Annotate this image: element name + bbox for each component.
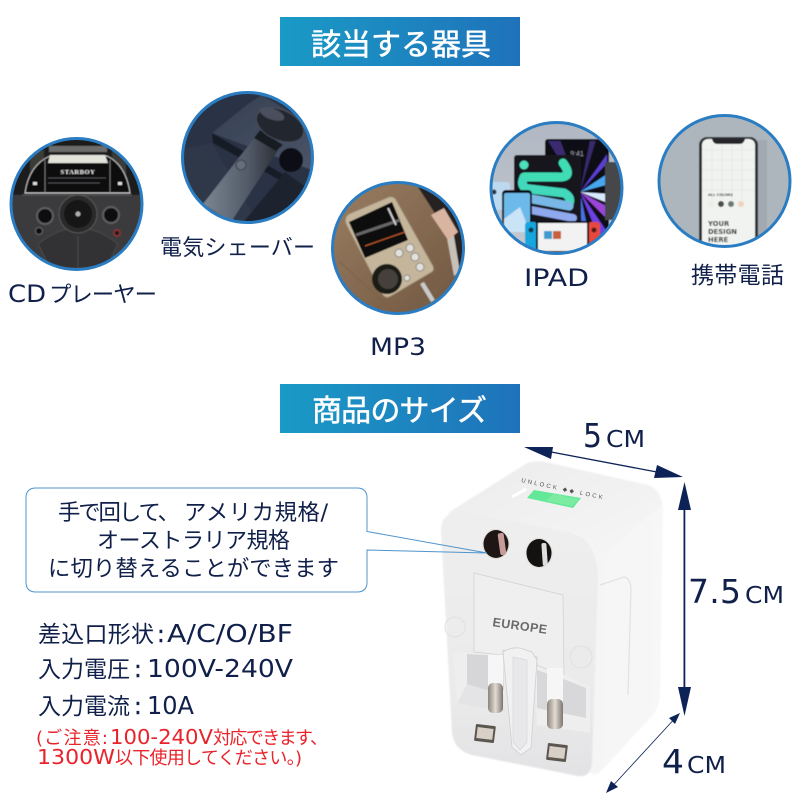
- dimension label: 4cm: CM: [687, 751, 726, 779]
- right recess: [535, 667, 590, 733]
- label: CD player: プレーヤー: [49, 282, 157, 308]
- specification list: :: [157, 622, 165, 648]
- specification list: 10A: [147, 691, 194, 720]
- specification list: 入力電圧: [38, 657, 130, 683]
- device: mobile phone: [657, 114, 792, 289]
- specification list: 入力電流: [38, 694, 130, 720]
- dimension label: 5cm: CM: [606, 425, 645, 453]
- label: CD player: CD: [8, 280, 46, 308]
- icon: phone photo: ALL COLORS: [708, 193, 733, 197]
- callout: switching plug standards: [26, 488, 487, 592]
- contact right: [546, 743, 568, 762]
- specification list: A/C/O/BF: [167, 619, 293, 648]
- icon: CD player photo: STARBOY: [61, 169, 95, 176]
- device: CD player: [8, 136, 157, 308]
- heading: applicable devices: 該当する器具: [311, 28, 491, 63]
- heading: applicable devices: [280, 17, 520, 66]
- icon: phone photo: [660, 117, 788, 245]
- red caution note: (ご注意:: [36, 728, 108, 749]
- heading: product size: 商品のサイズ: [312, 394, 487, 429]
- icon: phone photo: HERE: [708, 236, 729, 244]
- dimension label: 7.5cm: 7.5: [688, 572, 741, 611]
- specification list: 100V-240V: [147, 654, 293, 683]
- icon: shaver photo: [184, 94, 311, 221]
- dimension arrow: width: [524, 447, 683, 478]
- red caution note: 対応できます、: [213, 728, 328, 749]
- europe panel: [474, 573, 564, 676]
- dimension label: 7.5cm: [688, 572, 784, 611]
- red caution note: 1300W: [37, 745, 115, 769]
- red caution note: 100-240V: [110, 725, 213, 749]
- dimension arrow: depth: [606, 713, 680, 793]
- specification list: :: [134, 657, 142, 683]
- dimension label: 4cm: [662, 742, 726, 781]
- heading: product size: [280, 384, 520, 433]
- left pin: [488, 655, 503, 713]
- side panel outline: [600, 577, 631, 695]
- device: iPad: [488, 120, 624, 292]
- dimension label: 5cm: 5: [583, 416, 602, 455]
- socket holes: [482, 529, 552, 568]
- callout: switching plug standards: に切り替えることができます: [48, 556, 339, 582]
- retaining circles: [445, 617, 592, 668]
- contact left: [474, 724, 496, 743]
- device: MP3 player: [330, 180, 470, 361]
- left recess: [453, 652, 505, 712]
- label: CD player: [8, 280, 157, 308]
- icon: CD player photo: [12, 140, 140, 268]
- red caution note: 以下使用してください。): [115, 748, 302, 769]
- icon: tablets photo: 9:41: [570, 151, 584, 158]
- icon: MP3 player photo: [334, 184, 462, 312]
- label: MP3: MP3: [370, 333, 426, 361]
- label: mobile phone: 携帯電話: [691, 263, 784, 289]
- dimension label: 4cm: 4: [662, 742, 684, 781]
- lock slider: UNLOCK ◆◆ LOCK: [521, 478, 603, 501]
- dimension label: 7.5cm: CM: [745, 581, 784, 609]
- icon: phone photo: DESIGN: [708, 228, 737, 236]
- specification list: :: [134, 694, 142, 720]
- product photo: travel adapter: [441, 461, 663, 776]
- adapter shell: [441, 461, 663, 776]
- specification list: [38, 619, 293, 720]
- icon: tablets photo: [492, 124, 620, 252]
- icon: phone photo: YOUR: [707, 220, 730, 228]
- specification list: 差込口形状: [38, 622, 154, 648]
- label: electric shaver: 電気シェーバー: [160, 236, 315, 261]
- red caution note: [36, 725, 328, 769]
- center slider tab: [503, 648, 537, 755]
- callout: switching plug standards: 手で回して、: [58, 500, 180, 526]
- callout: switching plug standards: オーストラリア規格: [97, 529, 290, 554]
- right pin: [547, 668, 563, 729]
- dimension arrow: height: [678, 482, 691, 716]
- dimension label: 5cm: [583, 416, 645, 455]
- device: electric shaver: [160, 90, 320, 261]
- callout: switching plug standards: アメリカ規格/: [184, 500, 328, 526]
- label: IPAD: IPAD: [524, 264, 589, 292]
- EUROPE label: EUROPE: [492, 615, 548, 637]
